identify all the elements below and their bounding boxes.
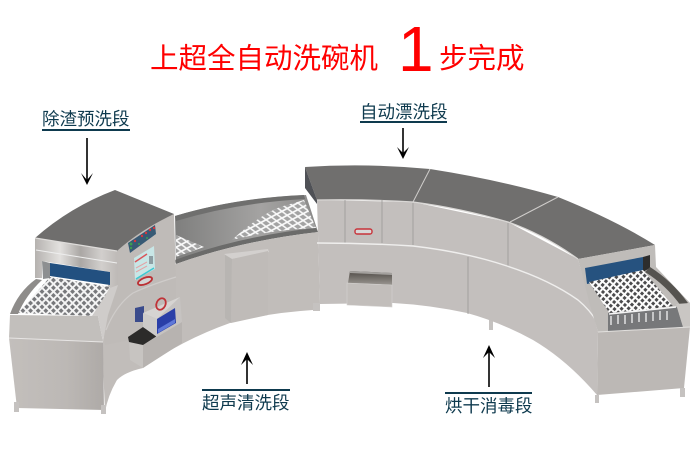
front tray [9, 315, 103, 342]
control lights strip [128, 225, 156, 253]
label: residue pre-wash: 除渣预洗段 [42, 109, 130, 129]
right arc section: rinse and drying [305, 165, 655, 395]
feet [595, 388, 685, 403]
side box in right section [347, 271, 392, 307]
title: 步完成 [439, 43, 525, 75]
panel seams [345, 200, 508, 314]
title [150, 13, 525, 85]
base cabinet [9, 338, 104, 410]
right end: exit with conveyor rack [578, 245, 690, 403]
front accessory box with blue window [128, 297, 182, 368]
red handle [154, 297, 168, 311]
middle conveyor section: ultrasonic wash [102, 195, 320, 412]
feet of arc section [313, 303, 493, 330]
section lid [305, 165, 655, 259]
red handle [137, 275, 153, 287]
side rail [10, 279, 42, 314]
title: 1 [398, 13, 434, 85]
side box in middle section [224, 249, 269, 323]
label: ultrasonic wash: 超声清洗段 [202, 393, 290, 413]
dishwasher machine illustration [9, 165, 690, 414]
label: drying and disinfection: 烘干消毒段 [445, 396, 532, 416]
label: automatic rinse: 自动漂洗段 [360, 102, 448, 122]
control screen [134, 246, 155, 280]
rack [18, 277, 110, 316]
tower body [100, 214, 176, 345]
section front body [317, 200, 598, 395]
arrow: to ultrasonic wash [241, 352, 253, 384]
arrow: to rinse [397, 128, 409, 159]
lid [35, 190, 174, 251]
feet [14, 402, 106, 414]
blue inner wall [42, 261, 50, 279]
front band [35, 238, 118, 316]
title: 上超全自动洗碗机 [150, 43, 378, 75]
horizontal ledge [317, 243, 597, 322]
red handle [355, 229, 372, 234]
arrow: to drying [483, 345, 495, 387]
arrow: to pre-wash [81, 138, 93, 185]
left module: pre-wash [9, 190, 176, 414]
